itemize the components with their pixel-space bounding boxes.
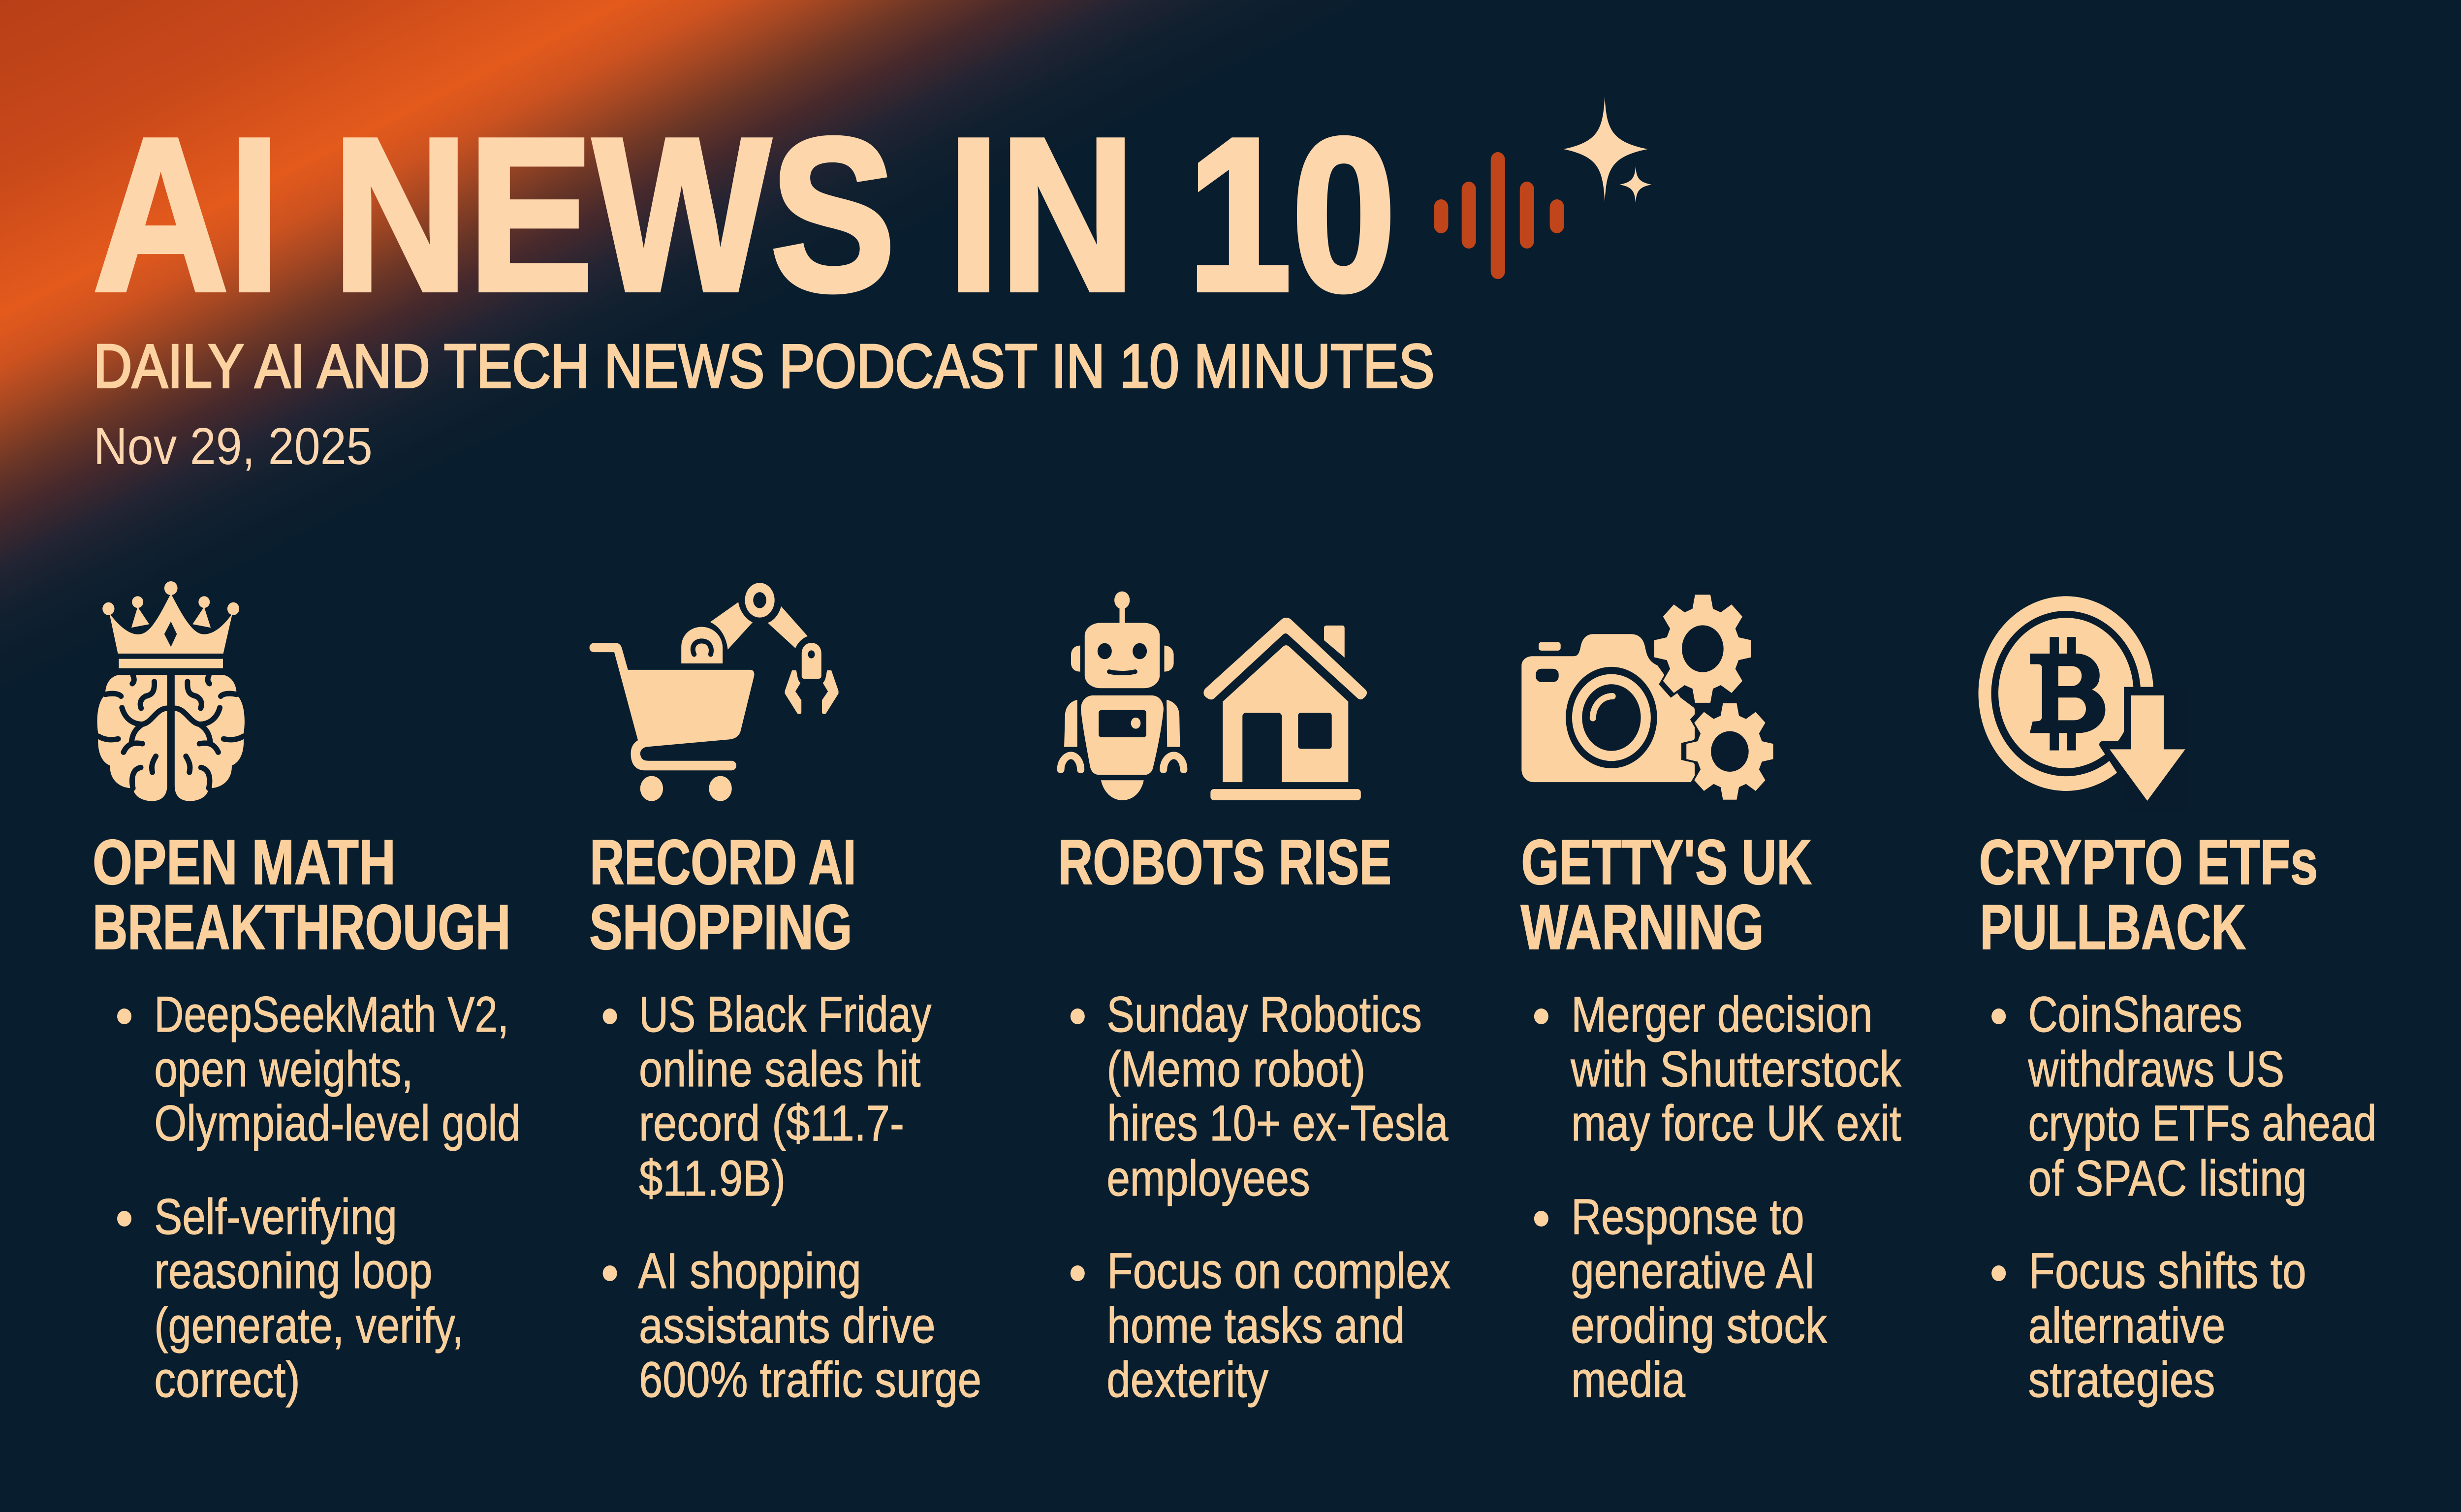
bullet 2: Focus on complex — [1107, 1243, 1451, 1299]
header block — [93, 93, 1652, 475]
bullet 2: AI shopping — [638, 1243, 861, 1299]
bullet 1: US Black Friday — [639, 986, 931, 1042]
heading — [1521, 827, 1812, 963]
bullet 1: (Memo robot) — [1106, 1041, 1365, 1097]
bullet 2: Response to — [1571, 1189, 1804, 1245]
panel: crypto etfs pullback — [1978, 596, 2376, 1408]
bullet 2: Focus shifts to — [2029, 1243, 2306, 1299]
bullet 1 — [603, 986, 931, 1206]
bullet 1 — [1991, 986, 2376, 1206]
bullet 2: alternative — [2028, 1297, 2225, 1354]
heading: WARNING — [1521, 892, 1764, 963]
bullet 1 — [117, 986, 520, 1151]
icon: robot and house — [1061, 592, 1367, 800]
bullet 2: home tasks and — [1107, 1297, 1405, 1354]
bullet 2: dexterity — [1106, 1352, 1268, 1408]
heading: BREAKTHROUGH — [93, 892, 510, 963]
bullet 2: Self-verifying — [154, 1189, 397, 1245]
bullet 2: 600% traffic surge — [639, 1352, 981, 1408]
panel: record ai shopping — [589, 583, 981, 1408]
bullet 1: Sunday Robotics — [1106, 986, 1422, 1042]
heading: ROBOTS RISE — [1058, 827, 1391, 898]
heading — [589, 827, 856, 963]
panel: open math breakthrough — [93, 581, 520, 1408]
bullet 1: Merger decision — [1571, 986, 1873, 1042]
icon: sparkles — [1564, 96, 1652, 203]
bullet 1: crypto ETFs ahead — [2028, 1095, 2376, 1151]
bullet 1: $11.9B) — [639, 1150, 786, 1206]
date: Nov 29, 2025 — [94, 417, 373, 475]
bullet 2: strategies — [2028, 1352, 2215, 1408]
bullet 1 — [1534, 986, 1901, 1151]
heading: GETTY'S UK — [1521, 827, 1812, 898]
bullet 1: withdraws US — [2028, 1041, 2284, 1097]
bullet 1: of SPAC listing — [2028, 1150, 2307, 1206]
bullet 1: with Shutterstock — [1570, 1041, 1901, 1097]
heading — [93, 827, 510, 963]
bullet 1 — [1071, 986, 1449, 1206]
bullet 2 — [1991, 1243, 2306, 1408]
heading: RECORD AI — [590, 827, 856, 898]
bullet 1: record ($11.7- — [639, 1095, 904, 1151]
icon: crowned brain — [97, 581, 245, 801]
bullet 1: CoinShares — [2028, 986, 2242, 1042]
bullet 2: eroding stock — [1571, 1297, 1827, 1354]
panel: robots rise — [1058, 592, 1451, 1408]
bullet 2: assistants drive — [639, 1297, 935, 1354]
heading: SHOPPING — [589, 892, 852, 963]
bullet 2 — [1071, 1243, 1451, 1408]
bullet 2 — [1534, 1189, 1827, 1408]
icon: bitcoin with down arrow — [1978, 596, 2187, 810]
panel: getty's uk warning — [1521, 589, 1901, 1408]
bullet 1: may force UK exit — [1571, 1095, 1901, 1151]
bullet 1: Olympiad-level gold — [154, 1095, 520, 1151]
icon: camera with gears — [1521, 589, 1778, 805]
bullet 2: reasoning loop — [154, 1243, 432, 1299]
subtitle: DAILY AI AND TECH NEWS PODCAST IN 10 MINUTES — [94, 332, 1434, 401]
heading: CRYPTO ETFs — [1979, 827, 2318, 898]
bullet 2 — [117, 1189, 464, 1408]
bullet 2: (generate, verify, — [154, 1297, 464, 1354]
heading — [1979, 827, 2318, 963]
title: AI NEWS IN 10 — [93, 93, 1396, 336]
icon: shopping cart with robot arm — [590, 583, 839, 801]
heading: PULLBACK — [1980, 892, 2246, 963]
heading: OPEN MATH — [93, 827, 396, 898]
bullet 1: open weights, — [154, 1041, 413, 1097]
bullet 1: employees — [1106, 1150, 1310, 1206]
bullet 2 — [603, 1243, 981, 1408]
bullet 1: hires 10+ ex-Tesla — [1107, 1095, 1449, 1151]
bullet 2: generative AI — [1571, 1243, 1815, 1299]
bullet 1: DeepSeekMath V2, — [154, 986, 509, 1042]
icon: waveform — [1434, 152, 1564, 279]
bullet 2: media — [1571, 1352, 1686, 1408]
bullet 2: correct) — [154, 1352, 300, 1408]
bullet 1: online sales hit — [639, 1041, 920, 1097]
